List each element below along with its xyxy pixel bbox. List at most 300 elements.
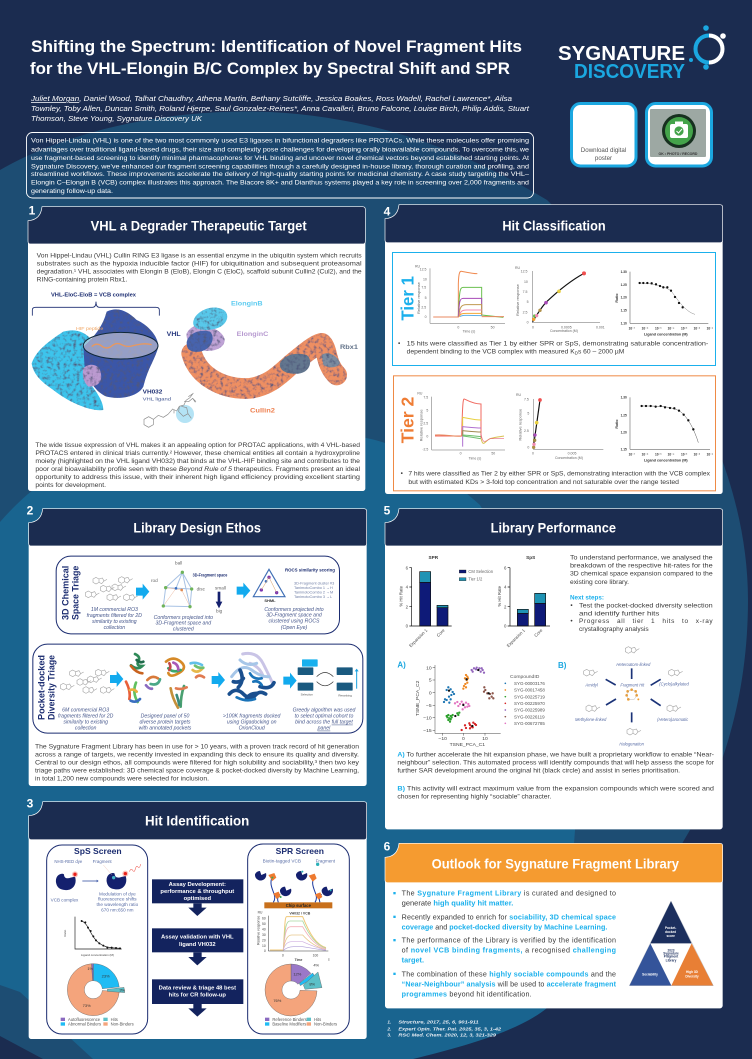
tier 1 dose response: 10⁻⁷ (629, 326, 636, 330)
tier 1 dose response: 10⁻⁵ (655, 326, 662, 330)
tier 2 dose response (615, 396, 713, 462)
tier 1 dose response: 10⁻¹ (707, 326, 713, 330)
commercial fragment structures (85, 577, 138, 601)
SpS screen panel (47, 845, 148, 1034)
QR photo icon box: OK • PHOTO / RECORD (659, 152, 698, 156)
3D triage captions: Conformers projected into (154, 615, 213, 621)
protein target ribbons (126, 654, 204, 708)
VH032 ligand structure (143, 390, 196, 427)
SpS assay schematic: Fragment (93, 859, 112, 864)
protein labels: Rbx1 (340, 344, 358, 351)
3D fragment space diagram: ball (175, 560, 182, 565)
docked protein ribbon (229, 653, 274, 700)
3D fragment space diagram: small (215, 585, 226, 590)
panel 1 body text: points for development. (35, 482, 106, 489)
ROCS similarity triangle (253, 568, 335, 603)
SpS hit rate bar chart: 2 (504, 604, 507, 609)
SpS hit rate bar chart: 4 (504, 585, 507, 590)
panel 2 body text: triage paths were established: 3D chemical space coverage & pocket-docked diversity by Machine Learning, (35, 768, 359, 775)
ROCS similarity triangle: SHML (264, 598, 276, 603)
3D triage captions: 3D-Fragment space and (266, 613, 322, 619)
3D triage captions: (Open Eye) (281, 625, 307, 631)
tier 1 box (392, 252, 715, 365)
logo: Sygnature Discovery: DISCOVERY (574, 61, 686, 83)
panel 1 body text: The wide tissue expression of VHL makes it an appealing option for PROTAC applications, with 4 VHL-based (35, 442, 360, 449)
tier 1 dose response: 10⁻² (694, 326, 700, 330)
tier 1 result text: dependent binding to the VCB complex with measured K (407, 349, 569, 356)
abstract box: generating follow-up data. (31, 188, 113, 195)
pocket-docked vertical title (36, 655, 56, 720)
scatter legend: SYG-00226119 (514, 714, 545, 719)
3D triage vertical title: 3D Chemical (60, 566, 70, 620)
panel 1 body text: moiety (highlighted on the VHL ligand VH032) that binds at the VHL-HIF binding site and contributes to the (35, 458, 360, 465)
tier 1 sensorgram: 7.5 (421, 286, 426, 290)
ROCS similarity triangle: ROCS similarity scoring (285, 568, 335, 573)
greedy algorithm diagram: Reranking (338, 693, 352, 697)
panel 3 heading: 3 (27, 797, 34, 811)
panel 5 explanation B (397, 786, 714, 801)
SpS legend: Autofluorescence (68, 1017, 101, 1022)
tier 1 dose response: 1.15 (621, 309, 627, 313)
tier 2 sensorgram (417, 392, 505, 461)
tier 1 result text: s 60 – 2000 µM (578, 349, 624, 356)
QR photo icon box (646, 104, 712, 166)
tier 1 sensorgram (415, 265, 505, 333)
SpS hit rate bar chart: 6 (504, 565, 507, 570)
performance text: 3D chemical space expansion compared to the (570, 571, 713, 578)
panel 6 heading (384, 840, 723, 883)
panel 5 explanation A (397, 751, 715, 775)
SPR sensorgram chart: VH032 / VCB (289, 911, 311, 915)
3D triage captions (87, 607, 324, 633)
panel 2 body text: across a range of targets, we recently invested in expanding this deck to ensure its quality and diversity. (35, 751, 359, 758)
tier 2 sensorgram: Relative response (418, 409, 423, 441)
panel 1 heading (28, 204, 365, 244)
SPR hit rate bar chart: SPR (429, 555, 439, 560)
panel 1 intro text (37, 253, 362, 284)
references: Structure, 2017, 25, 6, 901-911 (398, 1020, 479, 1025)
arrow (136, 584, 149, 600)
library triangle diagram (629, 901, 713, 986)
abstract box: Elongin C–Elongin B (VCB) complex illustrates this approach. The Biacore 8K+ and Dianthus systems played a key role in screening over 2,000 fragments and (31, 180, 529, 186)
SpS legend: Hits (111, 1017, 118, 1022)
panel 2 body text: The Sygnature Fragment Library has been in use for > 10 years, with a proven track record of hit generation (35, 744, 359, 751)
SpS hit rate bar chart: Expansion 1 (506, 627, 526, 648)
pocket-docked captions (58, 708, 356, 732)
pocket-docked captions: 6M commercial RO3 (62, 708, 109, 714)
tier 2 dose response: 10⁻¹ (707, 452, 713, 456)
tier 2 dose response: Ratio (615, 419, 619, 429)
abstract box: Sygnature Discovery, we've enhanced our fragment screening capabilities through a carefully designed in-house library, thorough curation and profiling, and (31, 164, 529, 170)
tier 1 affinity plot: 0.001 (596, 325, 605, 329)
ROCS similarity triangle: TanimotoCombo 3 →L (294, 595, 332, 599)
pocket-docked captions: to select optimal cohort to (295, 714, 353, 720)
panel 2 body text: in total 1,200 new compounds were selected for inclusion. (35, 776, 209, 783)
arrow (237, 583, 250, 599)
tier 2 result text: 7 hits were classified as Tier 2 by either SPR or SpS, demonstrating interaction with the VCB complex (408, 471, 711, 478)
bar chart legend (459, 569, 494, 582)
SpS legend (61, 1017, 134, 1027)
3D triage vertical title (60, 566, 80, 620)
pocket-docked captions: using Gigadocking on (227, 720, 277, 726)
references: RSC Med. Chem. 2020, 12, 3, 321-329 (398, 1033, 496, 1038)
panel 3: Hit Identification (27, 797, 367, 1039)
tier 1 sensorgram: Time (s) (463, 329, 475, 333)
panel 6: Outlook for Sygnature Fragment Library (384, 840, 723, 1038)
performance text (570, 554, 713, 586)
pocket-docked captions: Designed panel of 50 (141, 714, 189, 720)
tSNE scatter plot: −10 (423, 715, 432, 721)
SPR donut chart: 8% (309, 981, 316, 986)
SPR hit rate bar chart: Core (436, 627, 446, 638)
tier 2 affinity plot: 5 (527, 412, 529, 416)
workflow step 3: hits for CR follow-up (169, 993, 226, 999)
poster title: for the VHL-Elongin B/C Complex by Spectral Shift and SPR (30, 60, 510, 78)
library triangle diagram: Sociability (642, 973, 658, 977)
pocket-docked captions: fragments filtered for 2D (58, 714, 114, 720)
3D triage captions: Conformers projected into (264, 607, 324, 613)
workflow step 3 (152, 979, 243, 1017)
protein surface: Cullin2 complex (187, 307, 340, 388)
panel 2 body text (35, 744, 360, 783)
workflow step 3: Data review & triage 48 best (159, 986, 236, 992)
tier 1 sensorgram: 5 (425, 296, 427, 300)
poster title: Shifting the Spectrum: Identification of Novel Fragment Hits (31, 38, 522, 56)
pocket-docked captions: OrionCloud (239, 726, 265, 732)
download digital poster box (572, 104, 636, 166)
pocket-docked captions: similarity to existing (63, 720, 108, 726)
3D chemical space triage box (56, 556, 339, 634)
ROCS similarity triangle: TanimotoCombo 1 →H (294, 586, 333, 590)
SpS assay schematic: VCB complex (51, 898, 79, 903)
pocket-docked captions: >100K fragments docked (223, 714, 281, 720)
protein labels: VHL (167, 331, 181, 338)
outlook bullets: programmes beyond hit identification. (402, 991, 532, 999)
library triangle diagram: Fragment (664, 955, 679, 959)
tier 1 dose response: Ligand concentration (M) (644, 333, 688, 337)
VH032 ligand structure: VHL ligand (143, 397, 171, 403)
panel 1: VHL a Degrader Therapeutic Target (28, 204, 365, 491)
pocket-docked vertical title: Pocket-docked (36, 655, 46, 720)
tier 2 box (393, 376, 715, 491)
tier 2 sensorgram: 2.5 (423, 422, 428, 426)
next steps: Next steps: (570, 595, 604, 602)
panel 5 explanation B: chosen for representing highly “sociable” character. (397, 794, 552, 801)
SpS assay schematic: 670 nm:650 nm (101, 907, 134, 912)
SpS donut chart: 3% (119, 988, 126, 993)
abstract box: streamlined workflows. These improvements accelerate the delivery of high-quality starting points for medicinal chemistry. A case study targeting the VHL– (31, 171, 529, 178)
scatter legend: CompoundID (510, 674, 540, 679)
tier 1 sensorgram: RU (415, 265, 421, 269)
tier 2 affinity plot: Relative response (518, 408, 523, 441)
SpS assay schematic: NHS-RED dye (54, 859, 83, 864)
tier 2 sensorgram: -2.5 (422, 448, 428, 452)
pocket-docked captions: panel (317, 726, 331, 732)
library triangle diagram: score (666, 934, 675, 938)
tier 2 dose response: 1.20 (621, 431, 627, 435)
abstract box (26, 132, 534, 198)
SPR legend: Hits (314, 1017, 321, 1022)
pocket-docked diversity triage box (33, 644, 363, 733)
tier 1 dose response: 1.25 (621, 283, 627, 287)
arrow (212, 672, 225, 688)
pocket-docked captions: Greedy algorithm was used (293, 708, 356, 714)
panel 1 body text: opportunity to address this issue, with their inherent high ligand efficiency providing excellent starting (35, 474, 360, 481)
SpS dose response chart (63, 917, 122, 957)
tSNE scatter plot: 0 (462, 736, 465, 742)
SPR chip schematic: Biotin-tagged VCB (263, 858, 301, 863)
commercial fragment structures (60, 669, 114, 693)
tier 1 affinity plot: RU (515, 266, 521, 270)
SPR chip schematic (255, 858, 336, 908)
tier 1 result text (398, 340, 708, 356)
arrow (283, 673, 297, 689)
tier 1 dose response: 10⁻³ (681, 326, 687, 330)
tier 1 vertical title: Tier 1 (397, 276, 417, 321)
outlook bullets: of novel VCB binding fragments, a recognised challenging (402, 947, 616, 955)
outlook bullets: target. (402, 957, 424, 965)
tier 1 affinity plot (515, 266, 605, 333)
tier 1 affinity plot: 7.5 (523, 290, 528, 294)
tier 2 dose response: 10⁻⁴ (668, 452, 675, 456)
tier 1 result text: • (398, 340, 401, 347)
tier 2 dose response: 10⁻⁵ (655, 452, 662, 456)
B label: B) (558, 661, 567, 670)
references: 1. (387, 1020, 391, 1025)
outlook bullets: coverage and pocket-docked diversity by Machine Learning. (402, 924, 607, 932)
SPR sensorgram chart: 60 (262, 916, 266, 920)
tier 2 affinity plot (516, 393, 603, 460)
pocket-docked captions: collection (75, 726, 97, 732)
SPR chip schematic: Chip surface (286, 903, 312, 908)
SPR sensorgram chart: s (328, 958, 330, 962)
3D fragment space diagram: big (216, 609, 223, 614)
greedy algorithm diagram: Selection (301, 693, 313, 697)
panel 5 explanation A: A) To further accelerate the hit expansion phase, we have built a proprietary workflow to enable “Near- (397, 751, 714, 758)
fragment expansion diagram: Amidyl (584, 683, 599, 688)
panel 1 intro text: RING-containing protein Rbx1. (37, 277, 128, 284)
panel 1 intro text: Von Hippel-Lindau (VHL) Cullin RING E3 ligase is an essential enzyme in the ubiquitin system which recruits (37, 253, 362, 260)
SPR sensorgram chart: 20 (262, 939, 266, 943)
SPR chip schematic: Fragment (316, 858, 336, 863)
SPR donut chart: 76% (273, 998, 282, 1003)
panel 2 heading: Library Design Ethos (133, 520, 261, 535)
SpS assay schematic (51, 859, 141, 912)
protein labels: ElonginB (231, 300, 263, 307)
SpS hit rate bar chart: 0 (504, 624, 507, 629)
tSNE scatter plot: TSNE_PCA_C2 (415, 680, 421, 716)
tier 1 result text: 15 hits were classified as Tier 1 by either SPR or SpS, demonstrating saturable concentration- (407, 341, 708, 348)
panel 5 heading (384, 504, 723, 546)
panel 2 heading: 2 (27, 504, 34, 518)
tier 1 dose response: 1.10 (621, 322, 627, 326)
fragment expansion diagram: (Cyclo)alkylated (659, 682, 689, 687)
tier 1 sensorgram: 50 (491, 325, 495, 329)
3D triage vertical title: Space Triage (70, 566, 80, 620)
fragment expansion diagram (575, 647, 689, 747)
panel 5 explanation B: B) This activity will extract maximum value from the expansion compounds which were scored and (397, 786, 714, 793)
panel 2 heading (27, 504, 367, 546)
library triangle diagram: Sygnature (663, 952, 679, 956)
SPR sensorgram chart: 50 (262, 922, 266, 926)
3D triage captions: 1M commercial RO3 (91, 607, 138, 613)
outlook bullets: generate high quality hit matter. (402, 900, 513, 908)
authors: Juliet Morgan , Daniel Wood, Talhat Chaudhry, Athena Martin, Bethany Sutcliffe, Jessica Boakes, Ross Wadell, Rachel Lawrence*, Ailsa (30, 94, 512, 103)
tier 1 affinity plot: 0 (532, 325, 534, 329)
tSNE scatter plot: 0 (429, 690, 432, 696)
next steps (570, 595, 713, 633)
references: 2. (386, 1027, 391, 1032)
tSNE scatter plot: −15 (423, 728, 432, 734)
pocket-docked captions: with annotated pockets (139, 726, 192, 732)
SPR donut chart (265, 963, 322, 1016)
download digital poster box: poster (595, 155, 612, 162)
SPR legend (265, 1017, 337, 1027)
tier 1 sensorgram: 0 (425, 315, 427, 319)
tier 2 dose response: 10⁻⁶ (642, 452, 649, 456)
SPR donut chart: 12% (293, 971, 302, 976)
tier 1 affinity plot: Relative response (515, 283, 520, 316)
references: 3. (387, 1033, 391, 1038)
download digital poster box: Download digital (581, 147, 626, 154)
authors (30, 94, 530, 123)
tSNE scatter plot: 5 (429, 678, 432, 684)
tier 1 affinity plot: 10 (524, 280, 528, 284)
tier 1 affinity plot: Concentration (M) (550, 329, 578, 333)
outlook bullets: The combination of these highly sociable compounds and the (402, 971, 616, 979)
SpS donut chart: 23% (102, 974, 110, 979)
tier 2 sensorgram: 0 (426, 435, 428, 439)
3D triage captions: clustered using ROCS (268, 619, 320, 625)
next steps: • (570, 618, 573, 625)
panel 1 intro text: degradation.¹ VHL associates with Elongin B (EloB), Elongin C (EloC), scaffold subunit Cullin2 (Cul2), and the (37, 269, 362, 276)
SPR hit rate bar chart: 2 (406, 604, 409, 609)
tSNE scatter plot: TSNE_PCA_C1 (450, 742, 485, 748)
SpS hit rate bar chart: Core (533, 627, 544, 638)
workflow step 1 (152, 879, 243, 916)
tier 1 sensorgram: 12.5 (420, 268, 427, 272)
library triangle diagram: Pocket- (665, 926, 676, 930)
SPR sensorgram chart: 10 (262, 944, 266, 948)
greedy algorithm diagram (298, 659, 359, 697)
performance text: existing core library. (570, 579, 629, 586)
SpS donut chart: 1% (87, 966, 94, 971)
SPR hit rate bar chart: 0 (406, 624, 409, 629)
next steps: • (570, 603, 573, 610)
SPR hit rate bar chart: Expansion 1 (408, 627, 429, 648)
SPR sensorgram chart: Relative response (257, 916, 261, 945)
workflow step 1: performance & throughput (160, 889, 234, 895)
SpS legend: Non-Binders (111, 1022, 134, 1027)
tier 2 affinity plot: 7.5 (524, 397, 529, 401)
tSNE scatter plot (415, 665, 501, 748)
poster title (30, 38, 522, 78)
performance text: To understand performance, we analysed the (570, 554, 713, 561)
tier 2 affinity plot: 0 (527, 446, 529, 450)
next steps: crystallography analysis (579, 626, 649, 633)
tier 2 dose response: Ligand concentration (M) (644, 458, 688, 462)
next steps: Test the pocket-docked diversity selection (579, 603, 713, 610)
scatter legend: SYG-00017458 (514, 688, 545, 693)
SpS screen panel: SpS Screen (74, 846, 122, 856)
fragment expansion diagram: Halogenation (619, 742, 645, 747)
tier 1 affinity plot: 2.5 (523, 311, 528, 315)
SPR legend: Baseline Modifiers (272, 1022, 306, 1027)
SpS donut chart (67, 964, 126, 1016)
tier 1 affinity plot: 12.5 (521, 269, 528, 273)
authors: Thomson, Steve Young, Sygnature Discovery UK (31, 114, 203, 123)
tier 2 affinity plot: Concentration (M) (555, 456, 583, 460)
panel 5 heading: 5 (384, 504, 391, 518)
SPR hit rate bar chart: 4 (406, 585, 409, 590)
protein surface: VCB complex (32, 309, 158, 410)
3D fragment space diagram: disc (197, 587, 206, 592)
logo: Sygnature Discovery: SYGNATURE (558, 43, 685, 65)
workflow step 1: Assay Development: (169, 882, 226, 888)
SPR donut chart: 4% (313, 963, 320, 968)
panel 3 heading (27, 797, 367, 840)
SPR hit rate bar chart: 6 (406, 565, 409, 570)
tier 1 sensorgram: 0 (457, 325, 459, 329)
references: Expert Opin. Ther. Pat. 2025, 35, 3, 1-42 (398, 1027, 501, 1032)
SpS dose response chart: Ligand concentration (M) (81, 953, 114, 957)
tier 1 affinity plot: 0.0005 (561, 325, 572, 329)
library triangle diagram: 2023 (667, 949, 675, 953)
tier 1 dose response: Ratio (615, 293, 619, 303)
outlook bullets: “Near-Neighbour” analysis will be used to accelerate fragment (402, 981, 617, 989)
SpS hit rate bar chart (497, 555, 550, 648)
outlook bullets: Recently expanded to enrich for sociability, 3D chemical space (402, 914, 616, 922)
SpS hit rate bar chart: SpS (526, 555, 535, 560)
SPR screen panel: SPR Screen (276, 846, 324, 856)
panel 5 heading: Library Performance (491, 520, 616, 535)
pocket-docked captions: bind across the full target (295, 720, 353, 726)
tier 1 sensorgram: 2.5 (421, 306, 426, 310)
3D triage captions: 3D-Fragment space and (156, 621, 211, 627)
tier 2 sensorgram: 0 (460, 451, 462, 455)
panel 5: Library Performance (384, 504, 723, 829)
authors: Townley, Toby Allen, Duncan Smith, Roland Hjerpe, Saul Gonzalez-Reines*, Anna Cavalleri, Bruno Falcone, Louise Birch, Philip Addis, Stuart (31, 104, 530, 113)
tSNE scatter plot: 10 (426, 665, 432, 671)
tier 1 affinity plot: 0 (527, 321, 529, 325)
tier 2 dose response: 10⁻³ (681, 452, 687, 456)
tSNE scatter plot: −5 (426, 703, 432, 709)
SPR sensorgram chart: 30 (262, 933, 266, 937)
SPR sensorgram chart (257, 911, 330, 962)
SpS dose response chart: Ratio (63, 929, 67, 937)
panel 4: Hit Classification (384, 204, 723, 494)
VH032 ligand structure: VH032 (143, 390, 162, 396)
outlook bullets: The Sygnature Fragment Library is curated and designed to (402, 890, 616, 898)
tier 1 dose response: 10⁻⁶ (642, 326, 649, 330)
panel 1 intro text: substrates such as the hypoxia inducible factor (HIF) for ubiquitination and subsequent proteasomal (37, 261, 362, 268)
tier 1 affinity plot: 5 (527, 300, 529, 304)
tier 1 sensorgram: Relative response (416, 281, 421, 314)
tier 2 dose response: 10⁻² (694, 452, 700, 456)
tier 2 dose response: 1.30 (621, 396, 627, 400)
arrow (110, 671, 123, 687)
tier 2 dose response: 1.25 (621, 413, 627, 417)
SpS assay schematic: fluorescence shifts (98, 897, 137, 902)
panel 1 body text: PROTACS entered in clinical trials currently.² However, these chemical entities all contain a hydroxyproline (35, 450, 360, 457)
SPR sensorgram chart: 40 (262, 928, 266, 932)
3D triage captions: collection (104, 625, 125, 631)
abstract box: advantages over traditional ligand-based drugs, their size and complexity pose challenges for developing orally bioavailable compounds. To overcome this, we (31, 147, 529, 154)
tier 2 result text: but with estimated KDs > 3-fold top concentration and not saturable over the range tested (408, 479, 679, 486)
fragment expansion diagram: Methylene-linked (575, 717, 607, 722)
tier 2 sensorgram: 5 (426, 409, 428, 413)
3D fragment space diagram: rod (151, 578, 158, 583)
